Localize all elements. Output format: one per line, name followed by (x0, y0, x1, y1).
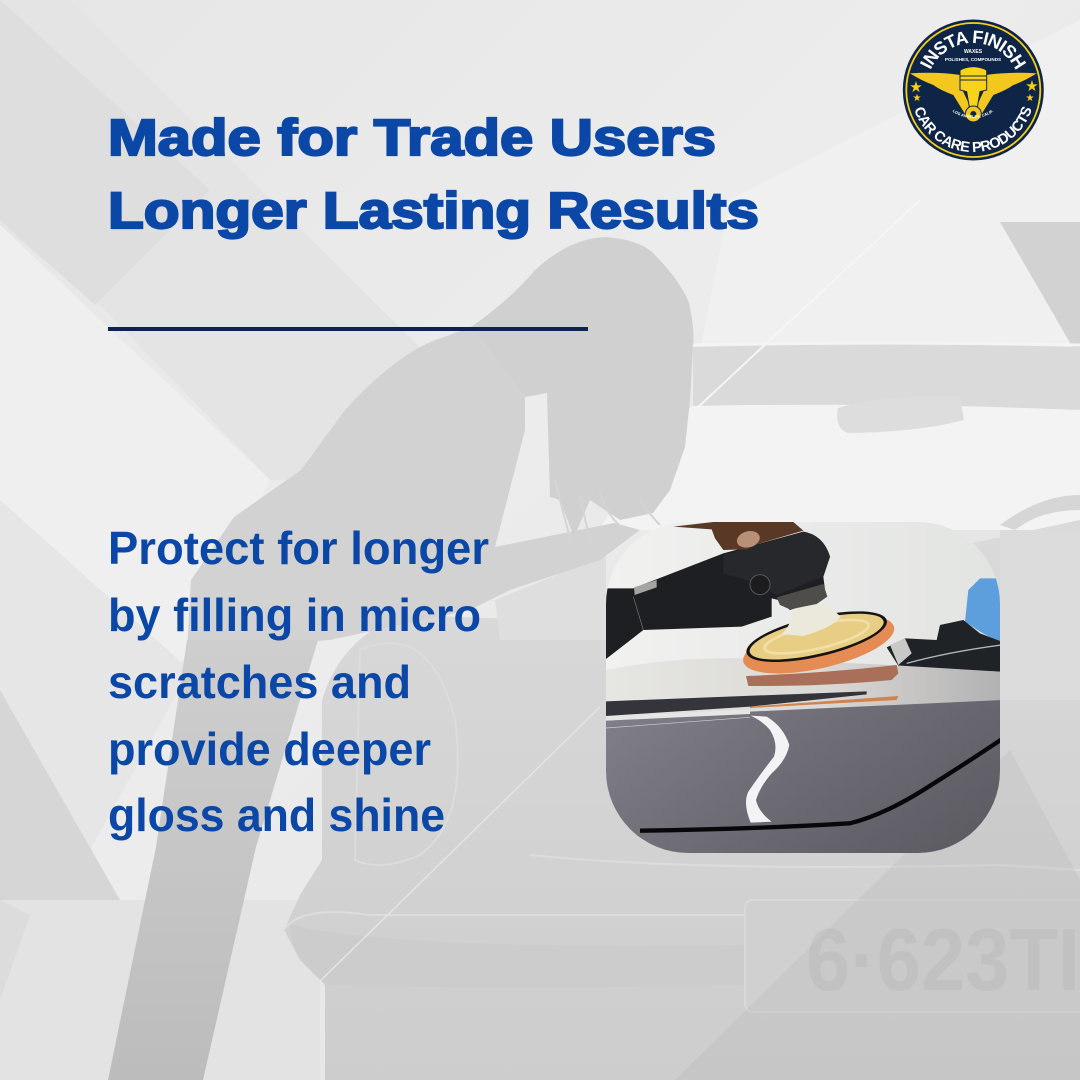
roof band inside windshield (693, 344, 1080, 410)
photo: pad reflection (746, 665, 898, 686)
logo: small text: POLISHES, COMPOUNDS (945, 57, 1001, 62)
photo: dark reflection strip (606, 691, 867, 716)
logo: bottom arc text: CAR CARE PRODUCTS (915, 106, 1031, 152)
logo: stars: ★ (913, 93, 922, 104)
logo: small text (945, 49, 1001, 118)
logo: Insta Finish badge (902, 20, 1044, 160)
background: woman silhouette (108, 237, 694, 1080)
bumper (290, 925, 745, 988)
photo: orange pad (743, 619, 894, 674)
body text: provide deeper (108, 723, 431, 775)
photo: polisher vent (750, 575, 770, 595)
photo: yellow backing (750, 614, 884, 660)
photo: hood (606, 658, 1002, 717)
logo: stars (909, 78, 1039, 104)
body text: scratches and (108, 656, 411, 708)
hair (471, 237, 694, 537)
title: Made for Trade Users (108, 109, 716, 166)
photo: white reflection (746, 716, 789, 823)
photo: polisher body (606, 532, 830, 659)
logo: wings and piston (910, 67, 1037, 122)
logo: small text: LOS ANGELES, CALIF. (952, 110, 994, 118)
photo: pad black ring (746, 611, 887, 662)
photo: polisher label (634, 580, 657, 595)
title: Longer Lasting Results (108, 182, 759, 239)
leg (108, 640, 318, 1080)
photo: polishing machine on car panel (606, 522, 1002, 855)
engine bay light area (495, 555, 606, 640)
wiper (1000, 495, 1080, 530)
photo: black body line (640, 739, 1002, 831)
headlight ring (355, 643, 458, 865)
photo: car door panel (606, 700, 1002, 855)
logo: stars: ★ (1025, 78, 1039, 95)
logo: stars: ★ (1026, 93, 1035, 104)
rear-view mirror (837, 396, 964, 433)
background: diagonal overlays (219, 200, 1080, 1080)
torso and arm (187, 327, 640, 650)
photo: polisher neck nut (777, 584, 827, 609)
background: car silhouette (284, 343, 1080, 1080)
car body (284, 520, 1080, 1080)
licence plate (745, 900, 1080, 1012)
photo: white cone (782, 603, 841, 636)
body text (108, 522, 489, 841)
title (108, 109, 759, 239)
body text: Protect for longer (108, 522, 489, 574)
logo: stars: ★ (909, 79, 923, 96)
divider (108, 327, 588, 331)
photo: hand (673, 522, 803, 550)
photo: blue cloth (965, 578, 1002, 643)
body text: by filling in micro (108, 589, 481, 641)
windshield (600, 405, 1080, 530)
logo: top arc text: INSTA FINISH (920, 30, 1026, 70)
logo: small text: WAXES (964, 49, 983, 55)
photo: engine bay parts (887, 620, 1002, 672)
body text: gloss and shine (108, 789, 445, 841)
car trim lines (530, 855, 1080, 870)
